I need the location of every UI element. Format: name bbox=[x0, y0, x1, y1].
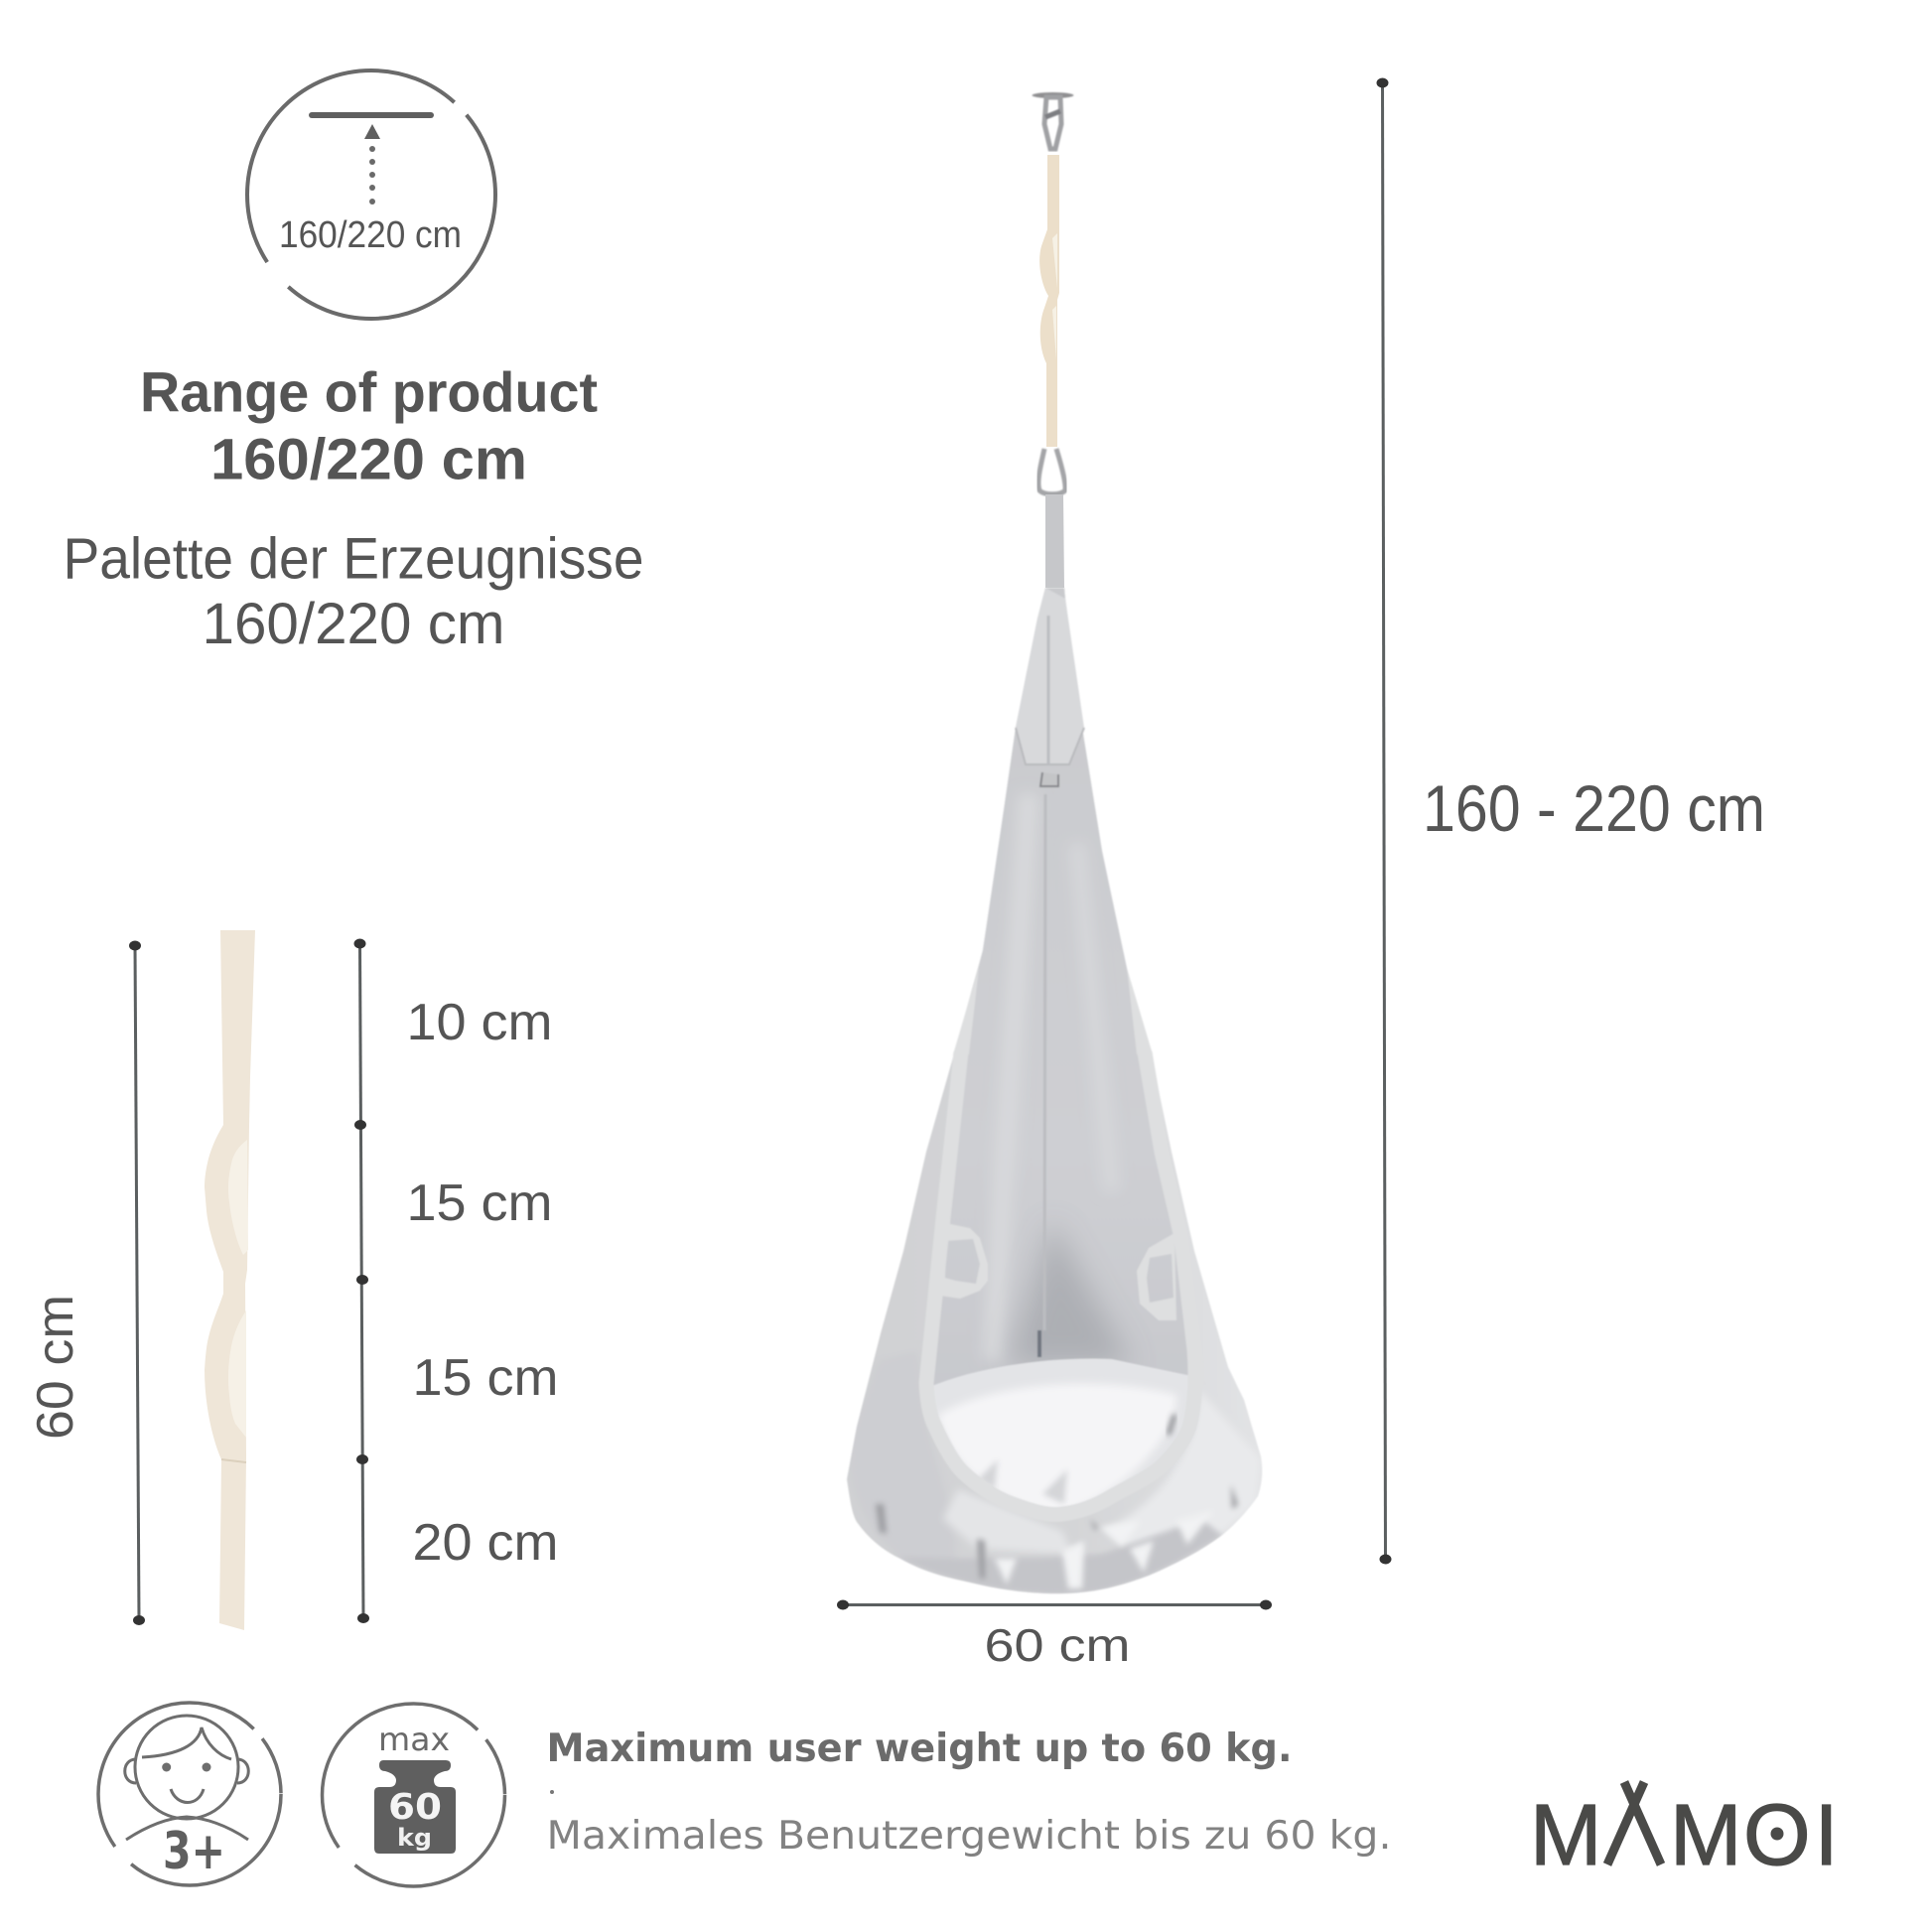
icon: age 3+ child: 3+ bbox=[163, 1822, 225, 1881]
icon: max 60 kg weight bbox=[322, 1704, 504, 1886]
weight text: Maximum user weight up to 60 kg. bbox=[546, 1726, 1293, 1771]
label: 15 cm lower: 15 cm bbox=[413, 1349, 558, 1407]
opening band bbox=[926, 968, 1195, 1514]
total height measure bbox=[1376, 77, 1392, 1565]
lower shell folds bbox=[873, 1400, 1243, 1593]
label: 20 cm: 20 cm bbox=[413, 1514, 558, 1572]
strap slot bbox=[1040, 772, 1058, 786]
hanging pod bbox=[847, 586, 1262, 1594]
top flap bbox=[1016, 588, 1084, 764]
heading: range of product: 160/220 cm bbox=[210, 427, 527, 492]
German heading: Palette der Erzeugnisse bbox=[64, 526, 643, 592]
beige strap with loops bbox=[205, 930, 255, 1630]
height icon: 160/220 cm bbox=[279, 214, 462, 256]
label: 10 cm: 10 cm bbox=[407, 994, 552, 1051]
left handle bbox=[940, 1223, 988, 1299]
logo: MAMOI: MAMOI bbox=[1530, 1787, 1839, 1883]
German heading: 160/220 cm bbox=[203, 592, 505, 656]
weight text: Maximales Benutzergewicht bis zu 60 kg. bbox=[546, 1814, 1392, 1859]
icon: age 3+ child bbox=[98, 1703, 281, 1885]
icon: max 60 kg weight: 60 bbox=[388, 1787, 442, 1828]
German heading bbox=[64, 526, 643, 656]
heading: range of product bbox=[140, 361, 598, 492]
heading: range of product: Range of product bbox=[140, 361, 598, 425]
right handle bbox=[1137, 1233, 1176, 1320]
hanging hardware and strap bbox=[1033, 92, 1074, 588]
interior shadow bbox=[1008, 1221, 1132, 1365]
label: 15 cm: 15 cm bbox=[407, 1174, 552, 1232]
pod interior panel bbox=[933, 588, 1187, 1507]
label: 160 - 220 cm: 160 - 220 cm bbox=[1423, 771, 1765, 845]
height icon bbox=[247, 70, 495, 319]
strap total length measure bbox=[27, 941, 145, 1625]
weight text bbox=[546, 1726, 1392, 1859]
strap total length measure: 60 cm bbox=[27, 1295, 84, 1440]
centre seam bbox=[1044, 616, 1048, 1330]
width measure bbox=[837, 1600, 1272, 1671]
icon: max 60 kg weight: max bbox=[378, 1721, 450, 1758]
icon: max 60 kg weight: kg bbox=[397, 1824, 432, 1852]
lower seam bbox=[1037, 1330, 1041, 1357]
strap segment measure bbox=[353, 939, 369, 1623]
seat cushion bbox=[933, 1358, 1188, 1486]
width measure: 60 cm bbox=[985, 1619, 1130, 1671]
